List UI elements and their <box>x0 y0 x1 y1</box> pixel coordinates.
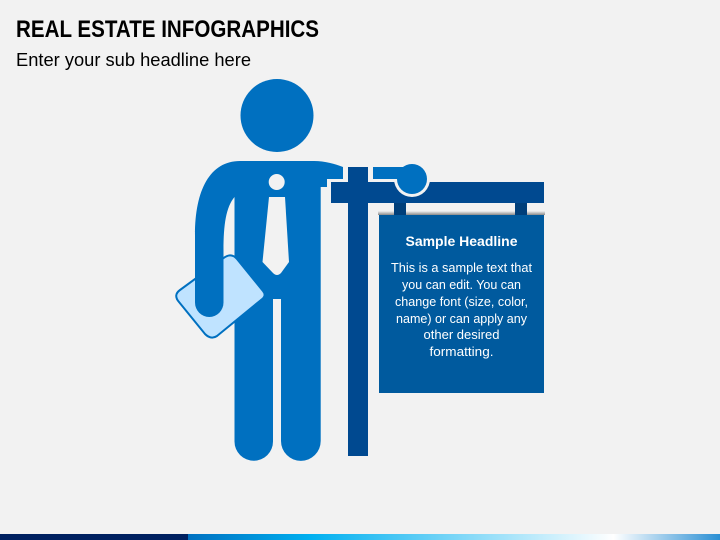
neck circle <box>269 174 285 190</box>
tie <box>262 197 289 275</box>
footer bar <box>0 534 720 540</box>
clipboard <box>176 255 265 338</box>
forearm over clipboard <box>195 250 224 317</box>
sign shadow <box>378 211 545 215</box>
sign body text: you can edit. You can <box>402 278 521 292</box>
sign body text: This is a sample text that <box>391 261 533 275</box>
sign body text: other desired <box>424 328 500 342</box>
hand on sign <box>373 164 427 194</box>
sign hangers <box>394 203 527 215</box>
sub headline: Enter your sub headline here <box>16 50 251 70</box>
sign body text <box>391 261 533 359</box>
torso, shoulder and legs <box>195 161 343 461</box>
icon: real estate agent with sign <box>176 79 544 461</box>
sign body text: name) or can apply any <box>396 312 528 326</box>
sign headline: Sample Headline <box>406 234 518 249</box>
sign body text: change font (size, color, <box>395 295 528 309</box>
title: REAL ESTATE INFOGRAPHICS <box>16 16 319 43</box>
sign post and crossbar <box>331 167 544 456</box>
hand ring cut-out <box>394 161 430 197</box>
sign body text: formatting. <box>430 345 494 359</box>
sign panel <box>379 215 544 393</box>
head <box>240 79 314 152</box>
